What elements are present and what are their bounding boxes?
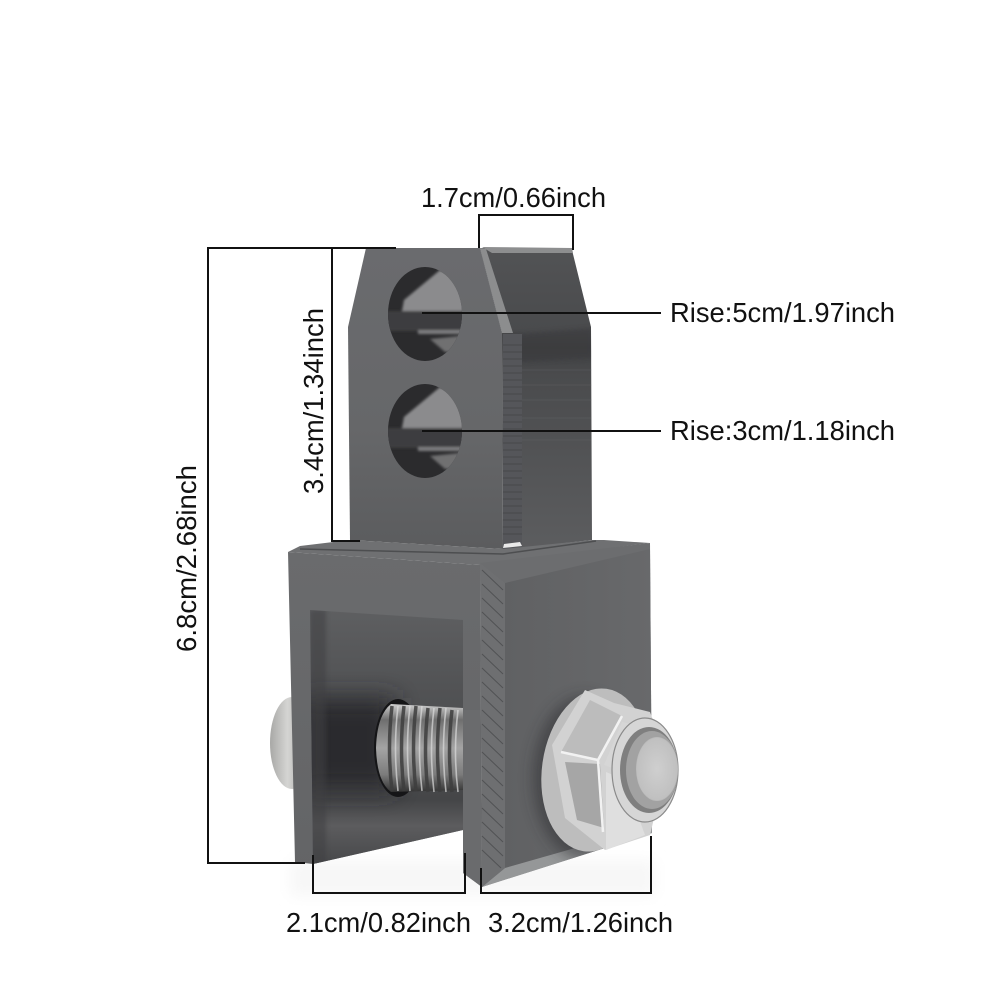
dimension line: upper block height (332, 248, 360, 541)
floor reflection (290, 860, 655, 896)
icon: bolt head (270, 697, 314, 789)
label: upper height: 3.4cm/1.34inch (298, 308, 329, 494)
leader line: rise 3cm (422, 430, 661, 432)
label: top width: 1.7cm/0.66inch (421, 182, 606, 213)
dimension line: side width (481, 836, 651, 893)
leader line: rise 5cm (422, 312, 661, 314)
label: side width: 3.2cm/1.26inch (488, 907, 673, 938)
label: overall height: 6.8cm/2.68inch (171, 465, 202, 652)
hole: rise 3cm (388, 384, 462, 478)
upper block right face (480, 248, 592, 550)
label: rise 5cm: Rise:5cm/1.97inch (670, 297, 895, 328)
icon: flange nut and bolt end (531, 681, 678, 860)
dimension line: overall height (208, 248, 396, 863)
lower right chamfer with weld hatch (480, 563, 505, 887)
lower front face (288, 552, 482, 887)
bolt tip (636, 737, 678, 801)
upper block front face (348, 248, 503, 549)
hole: rise 5cm (388, 267, 462, 361)
lower right face (480, 543, 652, 887)
dimension line: upper block width (479, 215, 573, 250)
bracket: lower body (288, 540, 652, 887)
nut hex (552, 690, 668, 850)
dimension line: inner width (313, 853, 465, 893)
label: rise 3cm: Rise:3cm/1.18inch (670, 415, 895, 446)
icon: threaded bolt shaft (374, 699, 463, 797)
base flange (288, 540, 650, 565)
infographic: bracket with dimensions (176, 187, 894, 932)
bolt collar (612, 718, 678, 822)
upper block weld edge (480, 248, 513, 333)
label: inner width: 2.1cm/0.82inch (286, 907, 471, 938)
bracket: upper block (348, 247, 592, 550)
lower recess with shadow (310, 610, 463, 864)
nut flange (531, 681, 659, 859)
